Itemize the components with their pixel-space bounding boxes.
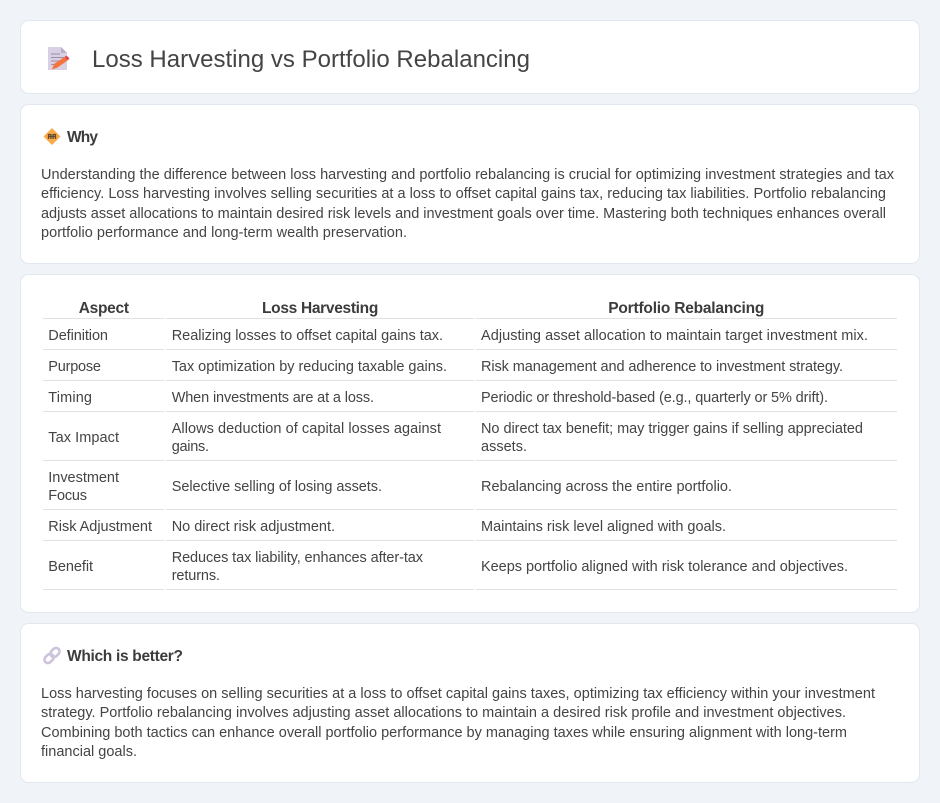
panel: comparison table [20, 274, 920, 612]
heading: which is better: Which is better? [67, 648, 183, 665]
row: benefit: Benefit [48, 559, 93, 575]
row: tax impact: assets. [481, 439, 527, 455]
row: benefit: returns. [172, 568, 220, 584]
row: timing: When investments are at a loss. [172, 390, 374, 406]
heading: why: Why [67, 129, 98, 146]
text block: why explanation: Understanding the difference between loss harvesting and portfolio rebalancing is crucial for optimizing investment strategies and tax [41, 167, 895, 183]
table header row [79, 300, 764, 317]
text block: which is better explanation: Loss harvesting focuses on selling securities at a loss to offset capital gains taxes, optimizing tax efficiency within your investment [41, 686, 875, 702]
row: investment focus: Selective selling of losing assets. [172, 479, 382, 495]
table header row: Loss Harvesting [262, 300, 378, 317]
text block: why explanation [41, 167, 895, 241]
row: investment focus: Investment [48, 470, 119, 486]
text block: why explanation: efficiency. Loss harvesting involves selling securities at a loss to offset capital gains tax, reducing tax liabilities. Portfolio rebalancing [41, 186, 886, 202]
icon: orange diamond sign [44, 129, 60, 144]
row: tax impact: No direct tax benefit; may trigger gains if selling appreciated [481, 421, 863, 437]
row: risk adjustment: No direct risk adjustment. [172, 519, 335, 535]
row: definition: Realizing losses to offset capital gains tax. [172, 328, 443, 344]
row: risk adjustment: Risk Adjustment [48, 519, 152, 535]
row: purpose: Purpose [48, 359, 101, 375]
row: tax impact: Allows deduction of capital losses against [172, 421, 441, 437]
row: definition [48, 328, 868, 344]
row: investment focus: Focus [48, 488, 87, 504]
row: benefit [48, 550, 848, 584]
panel: title header [20, 20, 920, 94]
table header row: Aspect [79, 300, 129, 317]
text block: why explanation: adjusts asset allocations to maintain desired risk levels and investment goals over time. Mastering both techniques enhances overall [41, 206, 886, 222]
text block: which is better explanation: strategy. Portfolio rebalancing involves adjusting asset allocations to maintain a desired risk profile and investment objectives. [41, 705, 846, 721]
text block: which is better explanation: financial goals. [41, 744, 137, 760]
row: purpose: Tax optimization by reducing taxable gains. [172, 359, 447, 375]
row: timing [48, 390, 828, 406]
row: timing: Timing [48, 390, 92, 406]
row: benefit: Keeps portfolio aligned with risk tolerance and objectives. [481, 559, 848, 575]
icon: link [43, 646, 61, 665]
row: timing: Periodic or threshold-based (e.g., quarterly or 5% drift). [481, 390, 828, 406]
row: purpose: Risk management and adherence to investment strategy. [481, 359, 843, 375]
row: tax impact [48, 421, 863, 455]
row: tax impact: Tax Impact [48, 430, 119, 446]
row: investment focus: Rebalancing across the entire portfolio. [481, 479, 732, 495]
row: purpose [48, 359, 843, 375]
panel: why [20, 104, 920, 264]
row: risk adjustment: Maintains risk level aligned with goals. [481, 519, 726, 535]
panel: which is better [20, 624, 920, 782]
text block: which is better explanation: Combining both tactics can enhance overall portfolio performance by managing taxes while ensuring alignment with long-term [41, 725, 847, 741]
table header row: Portfolio Rebalancing [608, 300, 764, 317]
title: Loss Harvesting vs Portfolio Rebalancing [92, 46, 530, 73]
row: risk adjustment [48, 519, 726, 535]
row: definition: Definition [48, 328, 108, 344]
row: investment focus [48, 470, 732, 504]
row: benefit: Reduces tax liability, enhances after-tax [172, 550, 424, 566]
row: tax impact: gains. [172, 439, 209, 455]
text block: which is better explanation [41, 686, 875, 760]
text block: why explanation: portfolio performance and long-term wealth preservation. [41, 225, 407, 241]
row: definition: Adjusting asset allocation to maintain target investment mix. [481, 328, 868, 344]
icon: memo with pencil [48, 47, 70, 70]
